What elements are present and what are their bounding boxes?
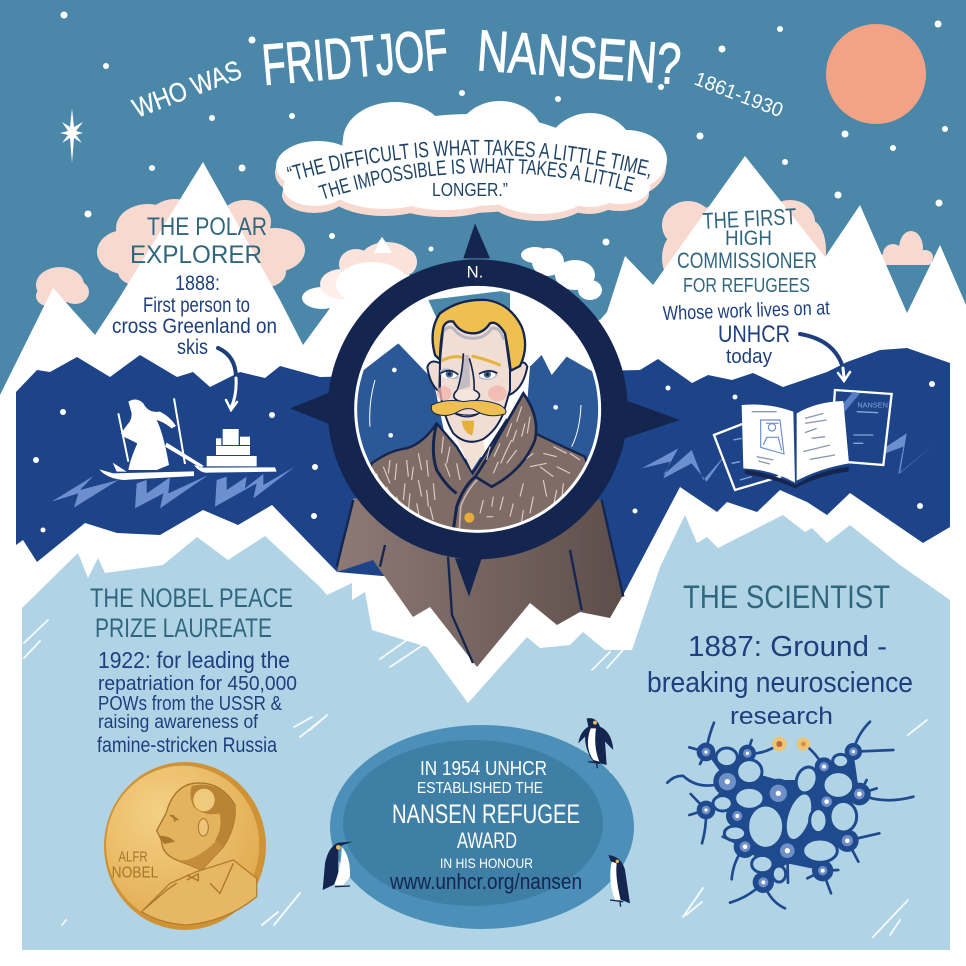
- skis: [99, 463, 194, 480]
- panel: nobel peace prize laureate: [90, 583, 297, 757]
- scientist heading: THE SCIENTIST: [683, 579, 890, 615]
- blue mountains in lens: [355, 343, 602, 473]
- medal bust: [142, 860, 257, 925]
- neuron cell nuclei: [702, 747, 865, 887]
- scientist text: breaking neuroscience: [647, 667, 913, 699]
- award url: www.unhcr.org/nansen: [389, 869, 582, 894]
- ears: [427, 362, 527, 395]
- title: FRIDTJOF: [259, 17, 450, 98]
- polar explorer text: [112, 272, 277, 359]
- panel: first high commissioner for refugees: [662, 203, 850, 381]
- award text: ESTABLISHED THE: [417, 780, 543, 797]
- small pink cloud far right: [880, 231, 933, 265]
- snow dots in band: [33, 381, 935, 532]
- lower white ice range: [0, 487, 966, 966]
- lens interior: [357, 288, 598, 530]
- title: 1861-1930: [691, 68, 786, 122]
- illustration: skier hauling sled: [52, 398, 295, 508]
- glass reflections: [370, 380, 581, 447]
- illustration: neuron network: [667, 722, 913, 908]
- cheeks: [437, 385, 507, 401]
- penguin bottom right: [608, 855, 630, 907]
- orange synapse glows: [772, 737, 810, 751]
- commissioner heading: HIGH: [725, 227, 772, 250]
- award text: IN 1954 UNHCR: [420, 758, 547, 780]
- nobel text: famine-stricken Russia: [97, 734, 277, 757]
- polar explorer text: cross Greenland on: [112, 315, 277, 338]
- nobel text: repatriation for 450,000: [98, 673, 297, 695]
- quote text: THE IMPOSSIBLE IS WHAT TAKES A LITTLE: [318, 158, 635, 199]
- hairline shadow: [443, 327, 504, 340]
- nobel text: raising awareness of: [98, 712, 259, 733]
- icon: north star: [60, 108, 83, 163]
- explorer portrait with compass: [290, 223, 680, 667]
- pink cloud behind polar explorer peak: [97, 199, 305, 288]
- eyes: [440, 368, 497, 380]
- nobel medal: [104, 762, 266, 930]
- back passport right: [830, 390, 892, 465]
- commissioner text: today: [726, 346, 772, 368]
- neck: [456, 433, 485, 471]
- polar explorer heading: EXPLORER: [130, 241, 262, 269]
- compass north label: N.: [467, 262, 483, 281]
- pink cloud behind high commissioner peak: [662, 200, 826, 282]
- ski poles: [118, 398, 185, 464]
- commissioner heading: COMMISSIONER: [677, 248, 817, 273]
- award text: IN HIS HONOUR: [440, 855, 533, 871]
- commissioner heading: FOR REFUGEES: [683, 275, 810, 297]
- fur coat: [370, 418, 587, 530]
- ice scratches: [24, 620, 927, 937]
- cloud right of compass: [521, 247, 602, 300]
- award text: NANSEN REFUGEE: [392, 799, 580, 829]
- nose: [454, 353, 479, 402]
- eyebrows: [442, 356, 501, 365]
- compass ring: [341, 273, 614, 546]
- scientist text: [647, 631, 913, 730]
- arrow to skier: [218, 348, 237, 410]
- medal head: [157, 783, 235, 870]
- goatee: [462, 421, 474, 436]
- polar explorer heading: THE POLAR: [147, 213, 267, 241]
- neuron dendrites: [667, 722, 913, 908]
- panel: nansen refugee award: [330, 725, 634, 929]
- penguins: [323, 718, 630, 907]
- polar explorer text: First person to: [143, 294, 250, 317]
- quote cloud: [275, 101, 667, 221]
- face: [440, 321, 510, 442]
- commissioner text: Whose work lives on at: [662, 297, 830, 325]
- snow dots in lens: [388, 368, 558, 438]
- title: NANSEN?: [475, 18, 683, 97]
- coat button: [464, 513, 474, 523]
- hair: [433, 300, 525, 371]
- sun: [826, 24, 926, 124]
- back passport right: NANSEN: [857, 401, 888, 410]
- nobel heading: [90, 583, 293, 643]
- neuron body mass: [706, 752, 859, 882]
- medal inscription: ALFR: [118, 850, 148, 866]
- nobel text: [97, 647, 297, 757]
- panel: the polar explorer: [112, 213, 277, 410]
- polar explorer text: skis: [177, 336, 208, 359]
- small pink cloud far left: [36, 267, 89, 306]
- snow dots in sky: [60, 12, 948, 252]
- commissioner heading: THE FIRST: [702, 203, 797, 234]
- sled: [165, 429, 277, 473]
- polar explorer heading: [130, 213, 267, 269]
- nobel text: 1922: for leading the: [98, 647, 290, 673]
- panel: the scientist: [647, 579, 913, 730]
- commissioner heading: [677, 203, 817, 297]
- ice zigzags: [642, 433, 935, 482]
- nobel heading: THE NOBEL PEACE: [90, 583, 293, 613]
- arrow to passport: [800, 334, 850, 381]
- fur collar right: [475, 393, 536, 487]
- coat below compass: [337, 498, 623, 667]
- ice zigzags: [52, 467, 295, 508]
- moustache: [431, 401, 506, 416]
- medal hair: [190, 785, 235, 847]
- passport photo: [761, 420, 784, 454]
- penguin top right: [578, 718, 613, 768]
- commissioner text: [662, 297, 830, 368]
- white lens rim: [356, 287, 600, 531]
- award text: AWARD: [457, 828, 517, 853]
- nobel heading: PRIZE LAUREATE: [95, 613, 272, 643]
- quote text: “THE DIFFICULT IS WHAT TAKES A LITTLE TIME,: [286, 140, 650, 180]
- title: [128, 17, 786, 124]
- light blue ice field: [22, 515, 950, 950]
- medal inscription: [112, 850, 159, 882]
- penguin left: [323, 842, 353, 890]
- medal inscription: NOBEL: [112, 865, 159, 882]
- polar explorer text: 1888:: [175, 272, 220, 295]
- scientist text: research: [730, 703, 833, 730]
- night band of dark blue mountains: [16, 348, 950, 620]
- compass star points: [290, 223, 680, 597]
- sky background: [0, 0, 966, 430]
- neuron cell bodies: [697, 743, 871, 893]
- mouth: [453, 413, 479, 417]
- nobel text: POWs from the USSR &: [98, 693, 283, 715]
- illustration: passports and open book: [642, 390, 935, 490]
- head detail: [427, 300, 527, 442]
- commissioner text: UNHCR: [718, 321, 790, 348]
- quote text: LONGER.”: [432, 180, 508, 200]
- skier figure: [121, 400, 176, 470]
- scientist text: 1887: Ground -: [688, 631, 887, 663]
- award pool inner: [343, 740, 603, 906]
- open book: [742, 401, 849, 488]
- award text: [392, 758, 580, 871]
- cloud left of compass: [302, 237, 417, 309]
- title: WHO WAS: [128, 55, 246, 124]
- award pool outer: [330, 725, 634, 929]
- back passport left: [714, 422, 780, 490]
- neuron gaps: [713, 748, 857, 882]
